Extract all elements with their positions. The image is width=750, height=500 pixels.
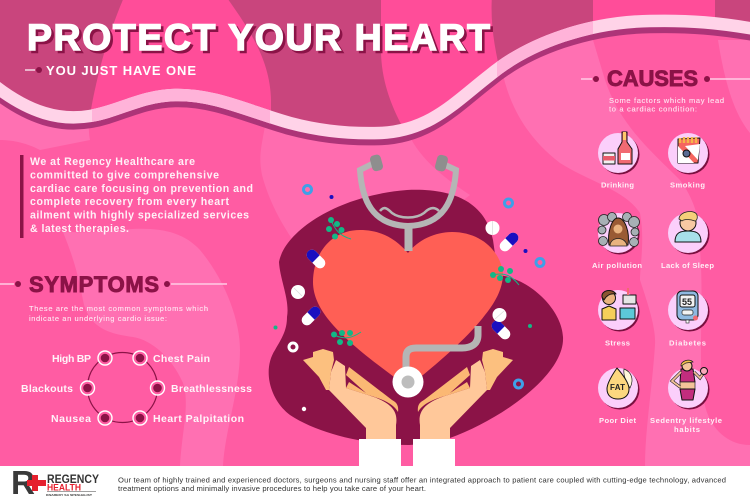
logo bbox=[11, 464, 99, 500]
footer text: treatment options and minimally invasive procedures to help you take care of your heart. bbox=[118, 484, 426, 493]
intro text block: cardiac care focusing on prevention and bbox=[30, 183, 253, 195]
symptoms intro text: indicate an underlying cardio issue: bbox=[29, 314, 167, 323]
heading: symptoms bbox=[0, 272, 227, 297]
cause: stress bbox=[598, 288, 640, 348]
cause: stress: Stress bbox=[605, 338, 630, 348]
heading: causes: CAUSES bbox=[607, 66, 698, 91]
cause: sedentary lifestyle: habits bbox=[674, 425, 700, 434]
logo: REGENCY bbox=[47, 474, 99, 486]
intro text block: & latest therapies. bbox=[30, 223, 129, 235]
intro text block: We at Regency Healthcare are bbox=[30, 156, 195, 168]
symptoms ring diagram: Heart Palpitation bbox=[153, 413, 244, 425]
right hand bbox=[418, 349, 513, 440]
central illustration: blob bbox=[269, 190, 563, 445]
title: PROTECT YOUR HEART bbox=[30, 18, 493, 60]
causes intro text: to a cardiac condition: bbox=[609, 104, 697, 114]
title: PROTECT YOUR HEART bbox=[27, 16, 490, 58]
logo: R bbox=[11, 464, 35, 500]
logo: HEALTH bbox=[47, 482, 81, 492]
cause: drinking bbox=[598, 132, 640, 190]
logo: KNAREDY SA SPESHALIST bbox=[46, 493, 92, 497]
causes intro text: Some factors which may lead bbox=[609, 96, 724, 105]
intro text block: ailment with highly specialized services bbox=[30, 210, 249, 222]
symptoms ring diagram bbox=[21, 351, 252, 425]
cause: lack of sleep bbox=[661, 212, 714, 270]
heart bbox=[313, 230, 503, 387]
left hand bbox=[303, 349, 398, 440]
leaf sprigs bbox=[326, 217, 519, 346]
footer bbox=[0, 464, 750, 500]
wave band bbox=[0, 21, 750, 139]
intro text block bbox=[20, 155, 253, 238]
pills and tablets bbox=[291, 221, 521, 341]
cause: sedentary lifestyle bbox=[650, 360, 722, 434]
footer text bbox=[118, 476, 726, 493]
symptoms intro text: These are the most common symptoms which bbox=[29, 304, 208, 313]
symptoms ring diagram: High BP bbox=[52, 353, 91, 365]
stethoscope bbox=[360, 154, 478, 398]
cause: smoking bbox=[668, 133, 710, 190]
rings and dots bbox=[274, 186, 544, 411]
cause: air pollution bbox=[592, 212, 642, 270]
subtitle: YOU JUST HAVE ONE bbox=[46, 63, 196, 78]
intro text block: complete recovery from every heart bbox=[30, 196, 229, 208]
symptoms intro text bbox=[29, 304, 208, 323]
cause: drinking: Drinking bbox=[601, 180, 634, 190]
cuffs bbox=[359, 439, 455, 466]
intro text block: committed to give comprehensive bbox=[30, 169, 219, 181]
cause: diabetes: 55 bbox=[682, 297, 692, 307]
cause: poor diet: FAT bbox=[610, 383, 625, 392]
cause: sedentary lifestyle: Sedentry lifestyle bbox=[650, 416, 722, 425]
cause: poor diet: Poor Diet bbox=[599, 416, 636, 425]
top band bbox=[0, 0, 750, 127]
cause: diabetes bbox=[668, 290, 710, 348]
heading: symptoms: SYMPTOMS bbox=[29, 272, 159, 297]
causes intro text bbox=[609, 96, 724, 114]
heading: causes bbox=[581, 66, 750, 91]
cause: lack of sleep: Lack of Sleep bbox=[661, 261, 714, 270]
footer text: Our team of highly trained and experienced doctors, surgeons and nursing staff offer an integrated approach to patient care coupled with cutting-edge technology, advanced bbox=[118, 476, 726, 484]
cause: poor diet bbox=[598, 368, 640, 425]
symptoms ring diagram: Chest Pain bbox=[153, 353, 210, 365]
cause: diabetes: Diabetes bbox=[669, 338, 706, 348]
cause: smoking: Smoking bbox=[670, 180, 705, 190]
cause: air pollution: Air pollution bbox=[592, 261, 642, 270]
symptoms ring diagram: Breathlessness bbox=[171, 383, 252, 395]
symptoms ring diagram: Nausea bbox=[51, 413, 91, 425]
symptoms ring diagram: Blackouts bbox=[21, 383, 73, 395]
